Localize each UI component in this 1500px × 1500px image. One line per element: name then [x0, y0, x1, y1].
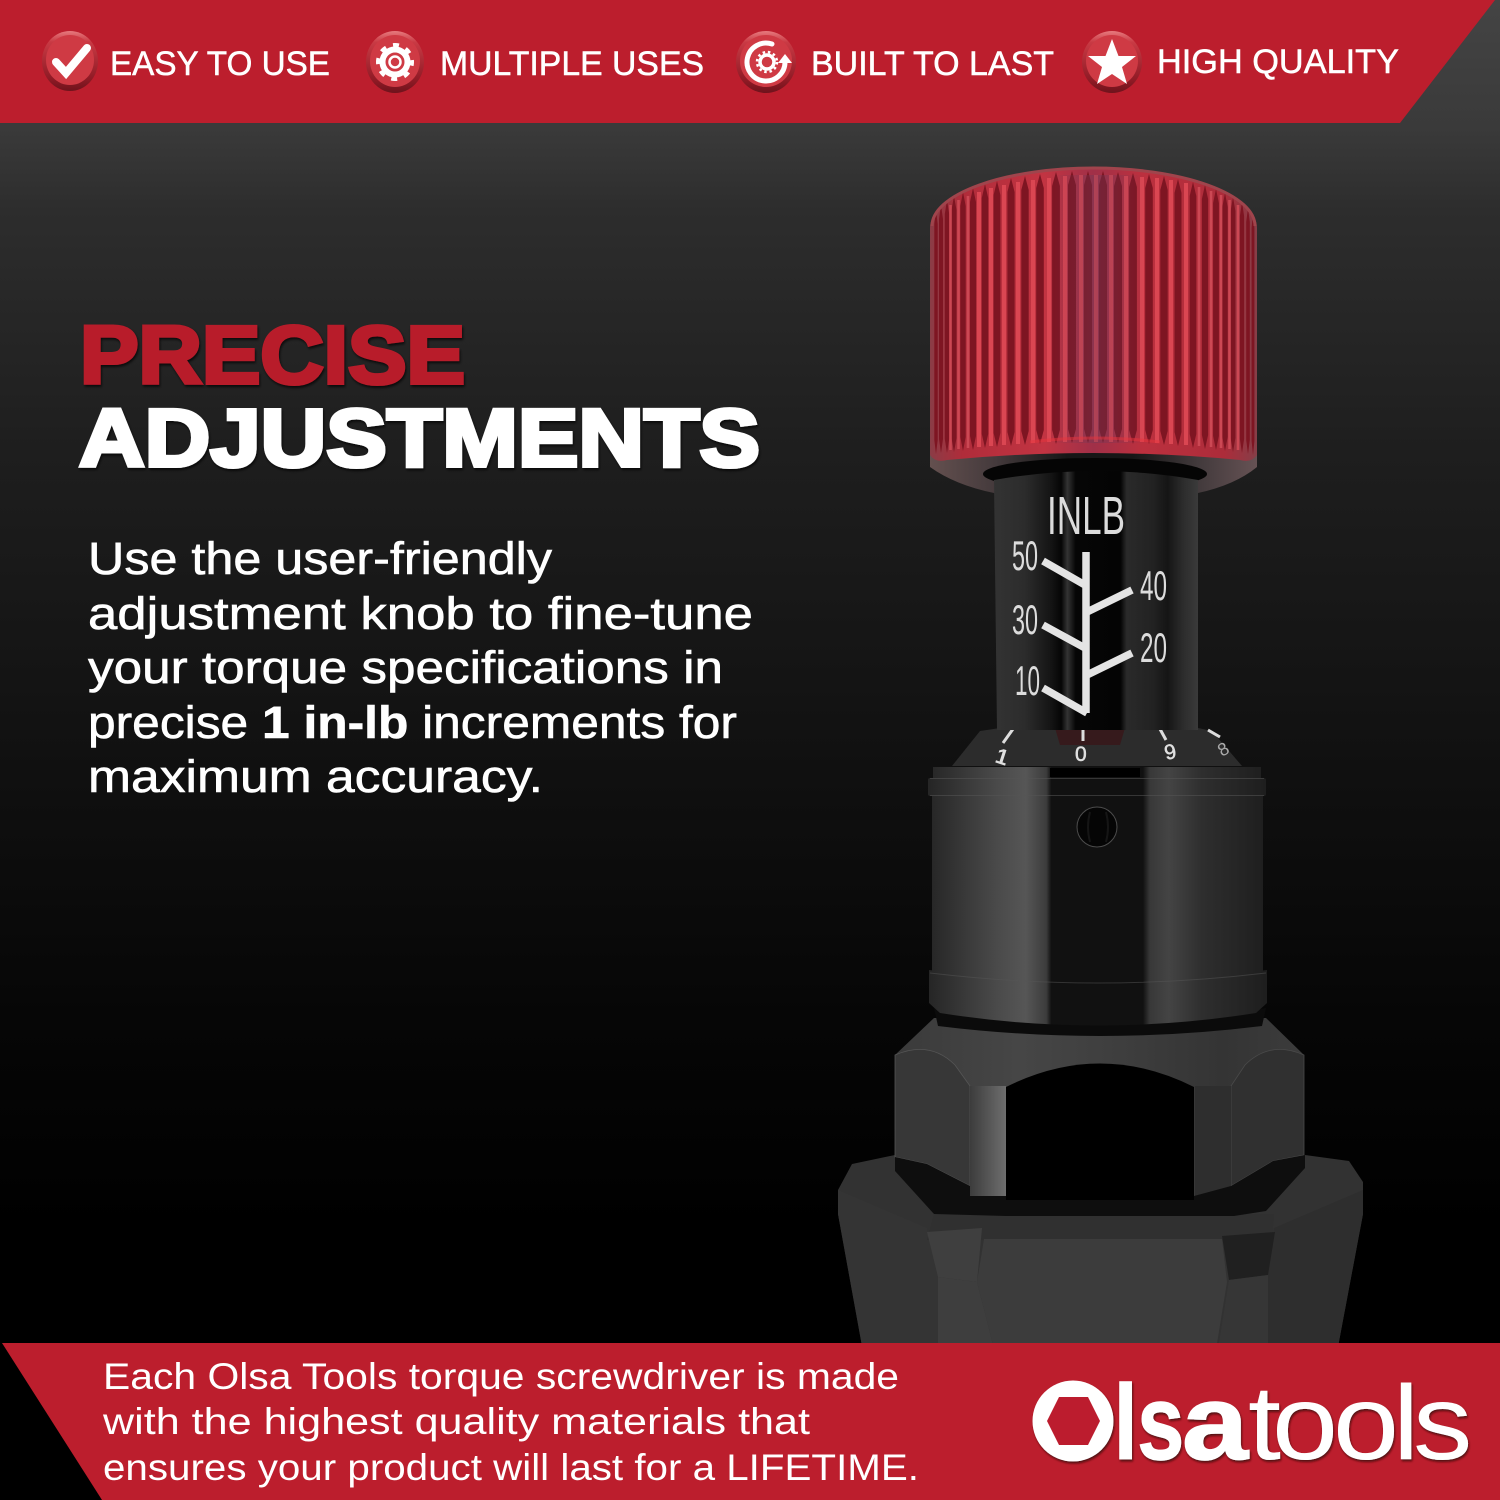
top red banner: [0, 0, 1495, 123]
dial cone with markings: 1: [992, 743, 1012, 771]
scale numbers: 30: [1012, 596, 1038, 643]
badge: easy to use: EASY TO USE: [110, 45, 330, 83]
knob underside: [930, 450, 1257, 493]
dial cone with markings: [952, 728, 1242, 771]
dial cone with markings: 8: [1214, 738, 1233, 760]
lower barrel ring: [929, 970, 1267, 1026]
dark groove under barrel: [934, 1008, 1266, 1036]
scale numbers: 50: [1012, 532, 1038, 579]
body text: maximum accuracy.: [88, 751, 543, 802]
screwdriver product illustration: [838, 168, 1363, 1368]
icon: check mark: [42, 31, 98, 91]
adjustment hole: [1077, 807, 1117, 847]
icon: gear with return arrow: [736, 31, 796, 93]
scale tree lines: [1043, 552, 1132, 713]
logo: Olsatools: ls: [1114, 1364, 1184, 1482]
dial cone with markings: 9: [1162, 740, 1178, 765]
body text: Use the user-friendly: [88, 533, 553, 584]
heading: PRECISE: [80, 310, 465, 401]
barrel top collar: [928, 767, 1266, 983]
logo: Olsatools: [1032, 1363, 1472, 1482]
icon: gear: [366, 31, 424, 93]
badge: multiple uses: MULTIPLE USES: [440, 45, 704, 83]
scale numbers: 20: [1140, 624, 1167, 671]
INLB scale: [1012, 486, 1167, 713]
scale shaft: [994, 471, 1198, 730]
body text: precise 1 in-lb increments for: [88, 697, 737, 748]
handle: [838, 1155, 1363, 1368]
scale numbers: [1012, 532, 1167, 704]
badge: built to last: BUILT TO LAST: [811, 45, 1054, 83]
icon: star: [1082, 31, 1142, 93]
INLB unit label: INLB: [1047, 486, 1125, 546]
heading: ADJUSTMENTS: [79, 393, 760, 484]
badge: multiple uses: [366, 31, 704, 93]
scale numbers: 40: [1140, 562, 1167, 609]
lifetime quality statement: with the highest quality materials that: [102, 1401, 811, 1442]
scale numbers: 10: [1015, 657, 1040, 704]
heading: [79, 310, 760, 484]
badge: high quality: HIGH QUALITY: [1157, 43, 1399, 81]
lifetime quality statement: [102, 1356, 919, 1488]
body text: your torque specifications in: [88, 642, 723, 693]
body text: [88, 533, 753, 802]
hex nut: [895, 1018, 1305, 1216]
dial cone with markings: 0: [1075, 743, 1087, 766]
badge: built to last: [736, 31, 1054, 93]
red knurled adjustment knob: [930, 168, 1257, 461]
logo: Olsatools: tools: [1248, 1363, 1472, 1482]
logo: Olsatools: O: [1040, 1364, 1110, 1482]
nut shadow band: [895, 1155, 1305, 1216]
barrel body: [932, 795, 1263, 983]
lifetime quality statement: Each Olsa Tools torque screwdriver is made: [103, 1356, 899, 1397]
bottom red banner: [2, 1343, 1500, 1500]
badge: easy to use: [42, 31, 330, 91]
logo: Olsatools: a: [1182, 1364, 1249, 1482]
lifetime quality statement: ensures your product will last for a LIFETIME.: [103, 1447, 919, 1488]
body text: adjustment knob to fine-tune: [88, 588, 753, 639]
badge: high quality: [1082, 31, 1399, 93]
